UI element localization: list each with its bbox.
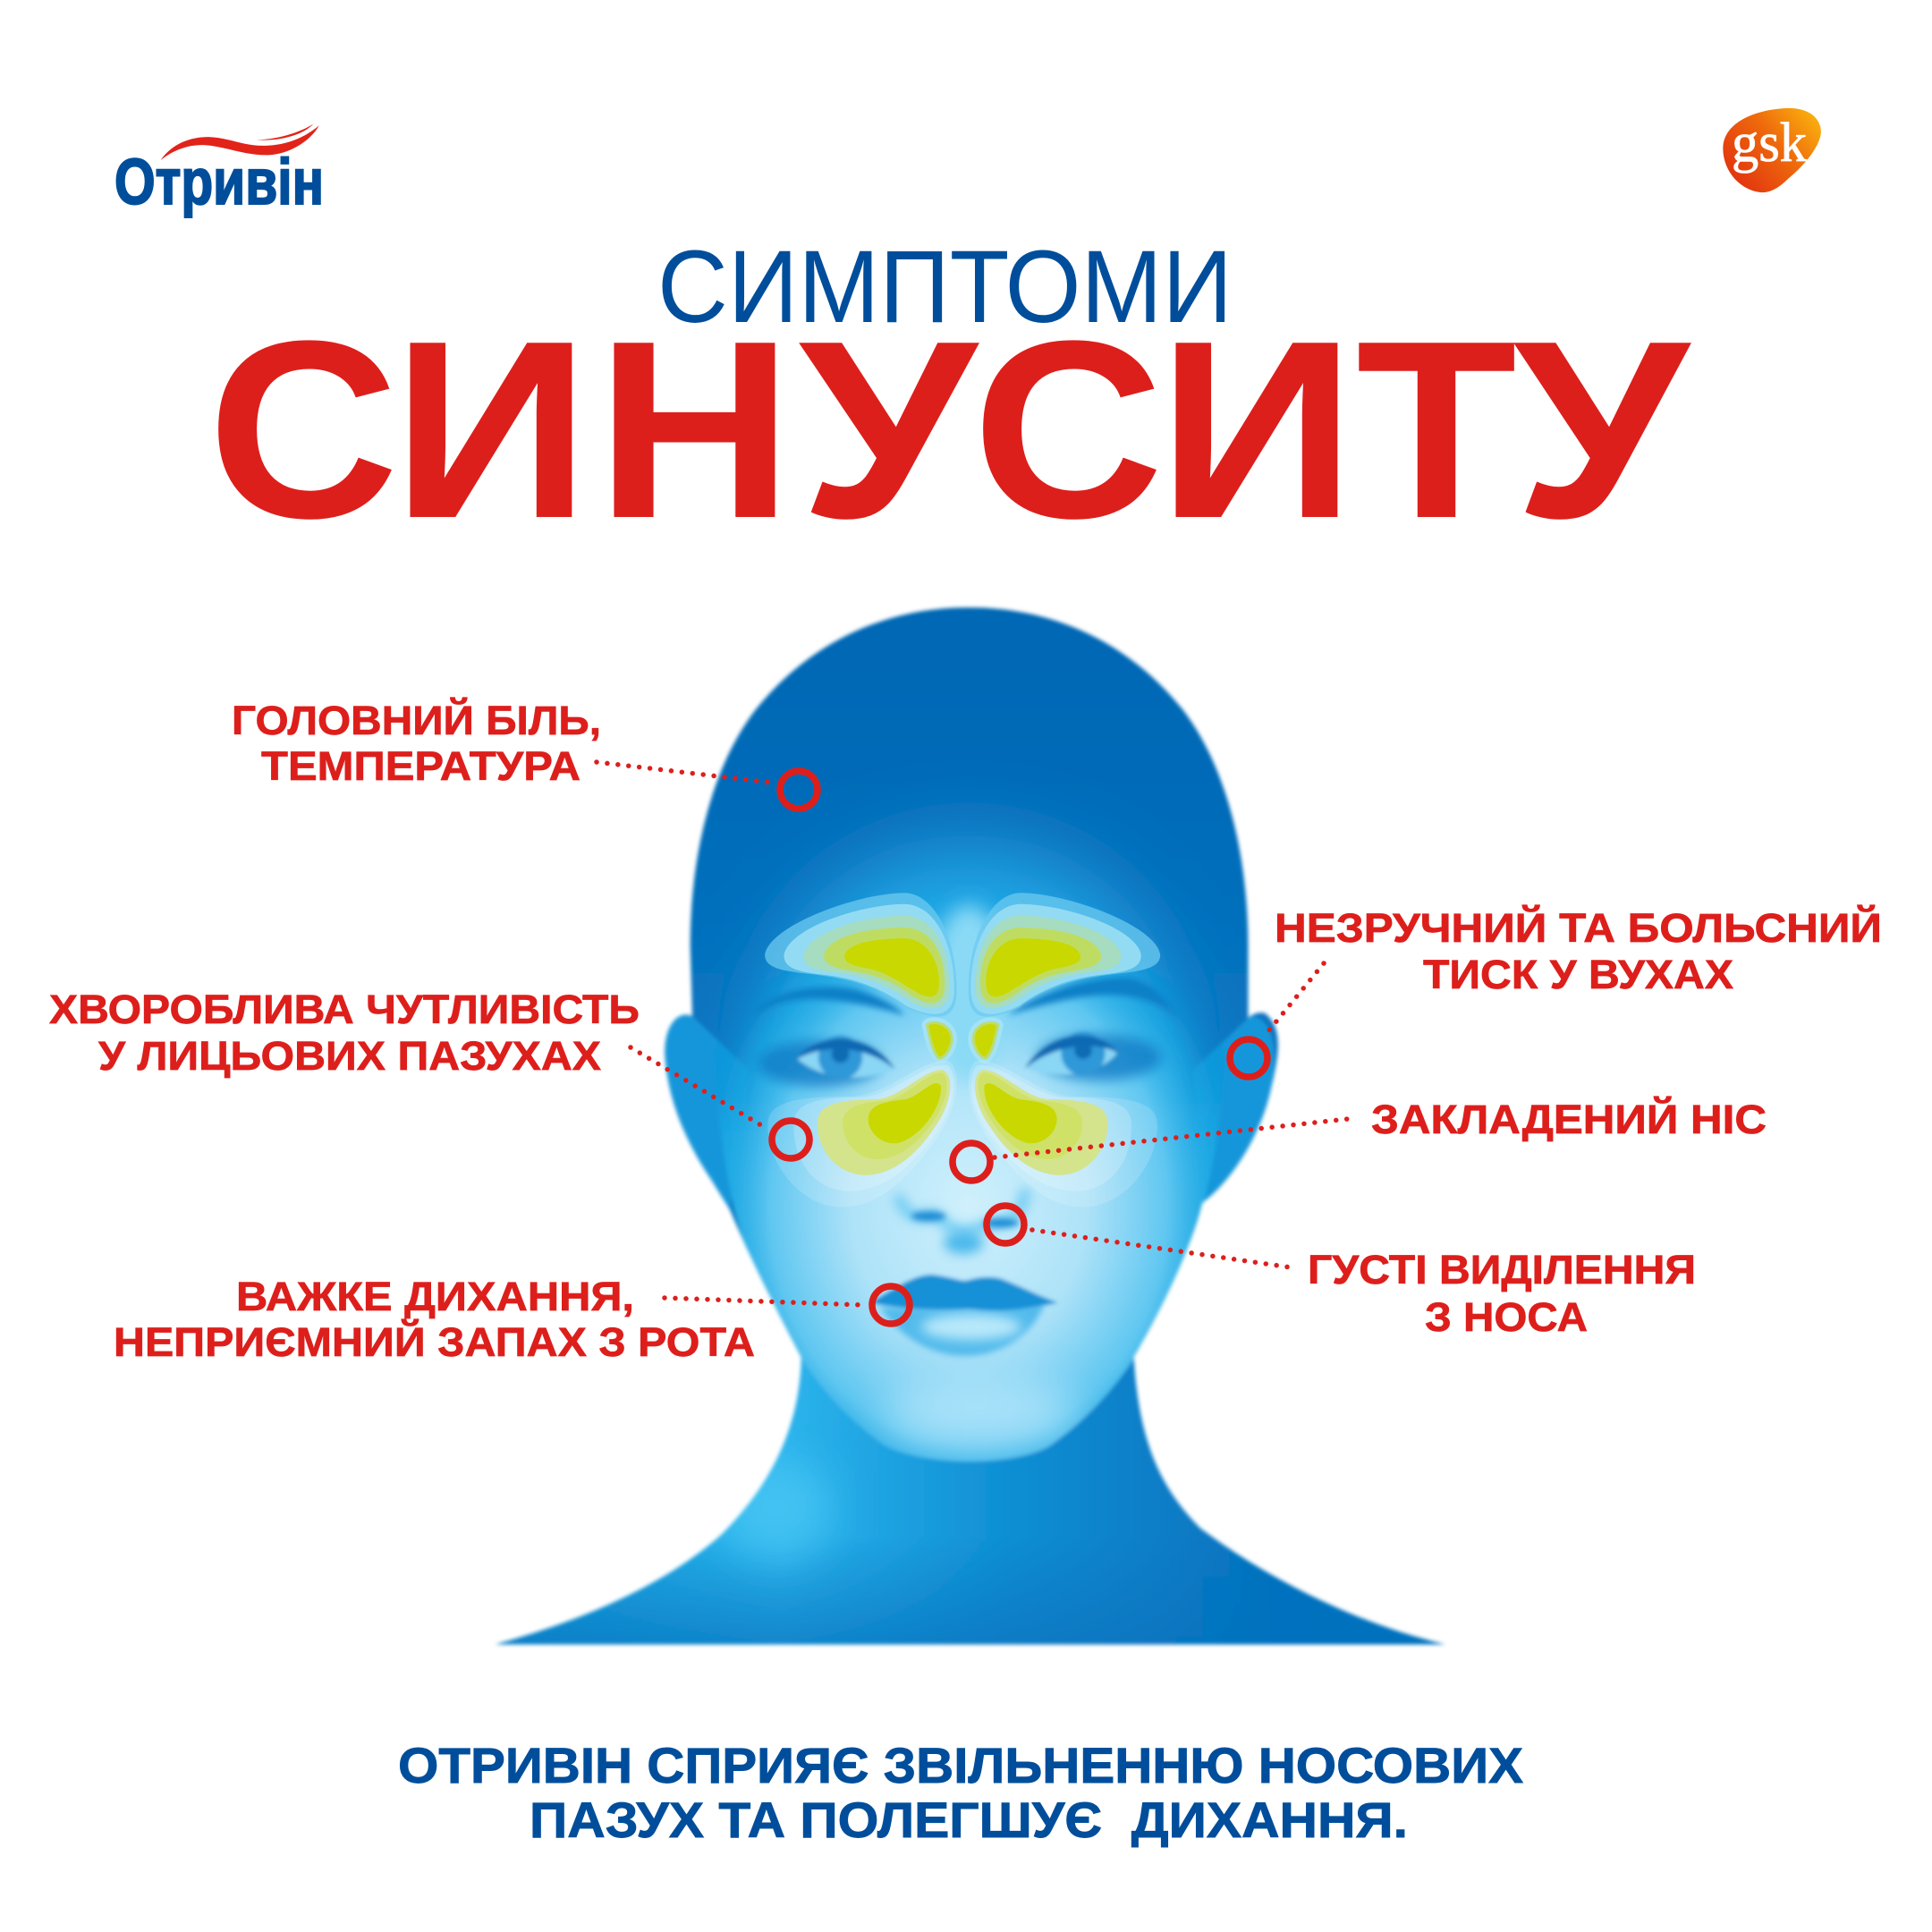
maxillary sinus right bbox=[969, 1061, 1157, 1208]
ear right bbox=[1193, 1017, 1275, 1203]
logo: GSK bbox=[1723, 108, 1821, 192]
label: ТИСК У ВУХАХ bbox=[1423, 952, 1733, 997]
title line 2: Н bbox=[596, 288, 793, 571]
nose wings bbox=[898, 1189, 1025, 1232]
label: ХВОРОБЛИВА ЧУТЛИВІСТЬ bbox=[49, 987, 640, 1032]
label: ГУСТІ ВИДІЛЕННЯ bbox=[1308, 1247, 1696, 1292]
nostril left bbox=[911, 1211, 946, 1222]
marker bbox=[953, 1143, 990, 1181]
logo: Otrivin bbox=[114, 124, 324, 218]
label bbox=[232, 698, 601, 789]
ear left bbox=[665, 1014, 749, 1210]
ethmoid sinus right bbox=[975, 1024, 996, 1056]
frontal sinus right bbox=[969, 893, 1160, 1017]
label bbox=[1308, 1247, 1696, 1340]
callout: headache and fever bbox=[232, 698, 818, 809]
dotted leader bbox=[995, 1118, 1356, 1157]
face highlight bbox=[719, 975, 1219, 1465]
left eye bbox=[796, 1036, 895, 1080]
marker bbox=[872, 1286, 910, 1324]
neck bottom shade bbox=[499, 1538, 1229, 1646]
callout: difficult breathing and bad breath bbox=[114, 1274, 910, 1365]
title line 2: Т bbox=[1356, 288, 1517, 571]
title line 2: С bbox=[208, 288, 399, 571]
marker bbox=[780, 771, 818, 809]
gsk wordmark: gsk bbox=[1732, 113, 1807, 174]
bottom statement: ПАЗУХ ТА ПОЛЕГШУЄ ДИХАННЯ. bbox=[530, 1792, 1408, 1848]
facial features bbox=[748, 978, 1179, 1356]
sinus zones bbox=[765, 893, 1160, 1208]
title line 2: У bbox=[799, 288, 982, 571]
marker bbox=[1230, 1039, 1267, 1077]
illustration: blue female head bbox=[495, 605, 1445, 1648]
marker bbox=[772, 1121, 809, 1158]
right brow bbox=[1007, 978, 1179, 1020]
neck light patch bbox=[721, 1460, 831, 1555]
callout: thick nasal discharge bbox=[987, 1206, 1696, 1340]
frontal sinus left bbox=[765, 893, 957, 1017]
label: У ЛИЦЬОВИХ ПАЗУХАХ bbox=[98, 1033, 601, 1079]
label: НЕПРИЄМНИЙ ЗАПАХ З РОТА bbox=[114, 1319, 755, 1365]
neck and shoulders bbox=[504, 1360, 1436, 1646]
chin highlight bbox=[886, 1377, 1077, 1446]
label bbox=[49, 987, 640, 1079]
gsk blob bbox=[1723, 108, 1821, 192]
title line 2: С bbox=[972, 288, 1164, 571]
callout: ear pressure bbox=[1230, 905, 1882, 1077]
logo swoosh bbox=[161, 124, 319, 160]
title line 2: И bbox=[1157, 288, 1356, 571]
right eye shadow bbox=[1038, 1034, 1161, 1080]
dotted leader bbox=[1032, 1230, 1297, 1268]
nostril right bbox=[984, 1218, 1019, 1228]
label bbox=[1275, 905, 1882, 997]
label bbox=[114, 1274, 755, 1365]
dotted leader bbox=[665, 1298, 863, 1305]
bottom statement bbox=[398, 1737, 1523, 1848]
marker bbox=[987, 1206, 1024, 1243]
lip highlight bbox=[921, 1314, 1021, 1340]
dotted leader bbox=[631, 1047, 766, 1128]
nasal bridge glow bbox=[931, 905, 1006, 1083]
lower lip bbox=[879, 1303, 1046, 1356]
forehead glow bbox=[714, 803, 1224, 1065]
logo wordmark: Отривін bbox=[114, 147, 324, 218]
dotted leader bbox=[597, 762, 772, 783]
title line 1: СИМПТОМИ bbox=[657, 230, 1233, 344]
label: ЗАКЛАДЕНИЙ НІС bbox=[1371, 1097, 1767, 1142]
title line 2: У bbox=[1513, 288, 1694, 571]
title line 2: И bbox=[392, 288, 590, 571]
label: З НОСА bbox=[1425, 1294, 1588, 1340]
bottom statement: ОТРИВІН СПРИЯЄ ЗВІЛЬНЕННЮ НОСОВИХ bbox=[398, 1737, 1523, 1793]
callout: facial sinus tenderness bbox=[49, 987, 809, 1158]
under-nose shadow bbox=[944, 1232, 983, 1254]
label: ВАЖКЕ ДИХАННЯ, bbox=[236, 1274, 634, 1319]
head silhouette bbox=[505, 605, 1281, 1644]
ethmoid sinus left bbox=[928, 1024, 950, 1056]
label: НЕЗРУЧНИЙ ТА БОЛЬСНИЙ bbox=[1275, 905, 1882, 951]
upper lip bbox=[869, 1275, 1058, 1310]
callout: blocked nose bbox=[953, 1097, 1767, 1181]
label: ГОЛОВНИЙ БІЛЬ, bbox=[232, 698, 601, 743]
left brow bbox=[748, 987, 904, 1020]
face bbox=[714, 896, 1225, 1465]
right eye bbox=[1024, 1031, 1119, 1075]
left eye shadow bbox=[758, 1040, 882, 1087]
label: ТЕМПЕРАТУРА bbox=[261, 743, 580, 789]
dotted leader bbox=[1268, 963, 1324, 1031]
maxillary sinus left bbox=[767, 1061, 957, 1208]
